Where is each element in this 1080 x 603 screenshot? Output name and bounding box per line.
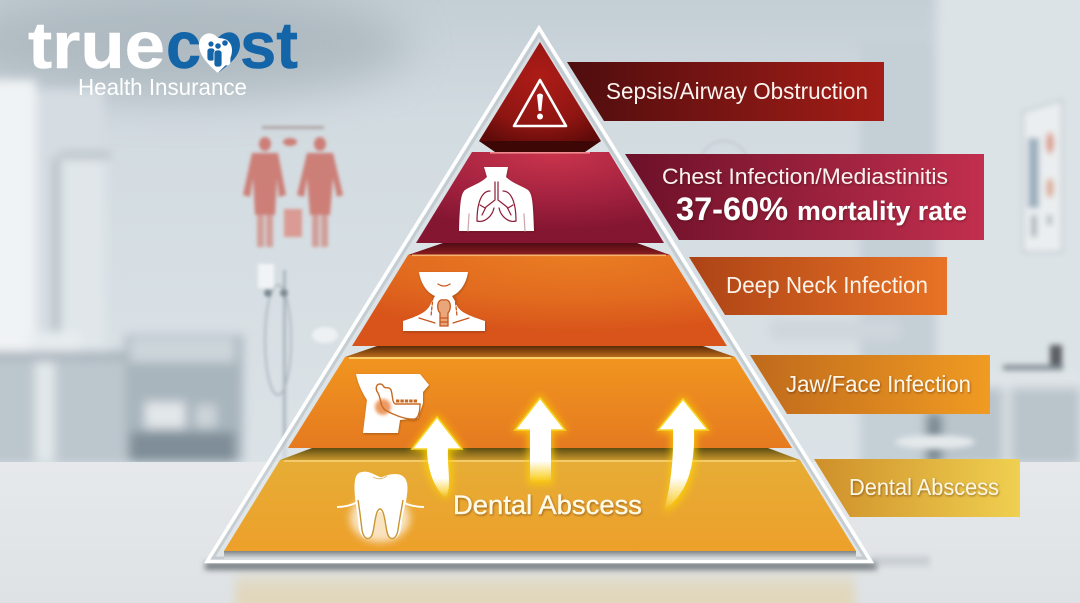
pyramid frame [207,28,871,562]
wordmark [28,8,298,82]
tier 4: jaw and face [280,357,800,460]
icon: heart with family [199,32,240,73]
wordmark: c [166,8,201,82]
label: chest with mortality rate: Chest Infection/Mediastinitis [662,164,948,189]
icon: torso with lungs [459,167,534,231]
tier 1: sepsis [479,42,601,152]
logo [28,8,298,100]
label: jaw and face [750,355,990,414]
tier 2: chest [408,152,670,255]
icon: neck and throat [403,272,485,331]
label: chest with mortality rate [625,154,984,240]
label: sepsis: Sepsis/Airway Obstruction [606,78,868,104]
label: deep neck: Deep Neck Infection [726,272,928,298]
arrow 3 [656,396,711,513]
icon: tooth [337,472,424,542]
label: chest with mortality rate: 37-60% [676,191,788,227]
icon: warning triangle [514,80,566,126]
label: jaw and face: Jaw/Face Infection [786,371,971,397]
pyramid [205,28,930,570]
label: dental abscess [814,459,1020,517]
label bars [567,62,1020,517]
label: sepsis [567,62,884,121]
arrow 2 [512,394,568,484]
label: chest with mortality rate: mortality rate [797,196,967,226]
pyramid floor shadow [205,556,930,570]
wordmark: st [240,8,298,82]
tagline: Health Insurance [78,74,247,100]
label: deep neck [689,257,947,315]
tier 5: dental abscess [224,460,856,551]
wordmark: true [28,8,165,82]
arrows: upward spread [410,394,711,513]
tier 3: deep neck [345,254,735,357]
icon: jaw profile [356,374,429,433]
label: dental abscess: Dental Abscess [849,474,999,500]
arrow 1 [410,414,465,499]
text: center label: Dental Abscess [453,490,642,520]
